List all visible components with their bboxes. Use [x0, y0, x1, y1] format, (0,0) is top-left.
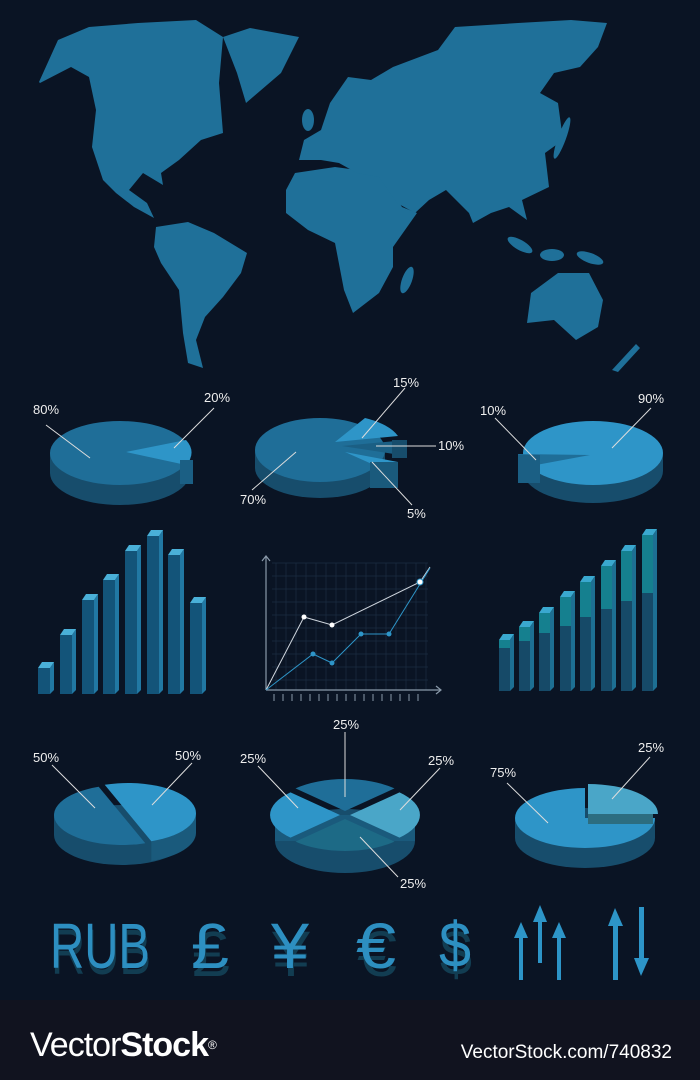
- pie chart 5: four quarters: [240, 717, 454, 891]
- pie chart 1: 80/20: 20%: [204, 390, 230, 405]
- footer logo: VectorStock®: [30, 1026, 217, 1064]
- pie chart 3: 90/10: 90%: [638, 391, 664, 406]
- currency symbols row: $: [439, 909, 471, 981]
- pie chart 2: 70/15/10/5: 10%: [438, 438, 464, 453]
- currency symbols row: [50, 909, 472, 990]
- footer url: VectorStock.com/740832: [461, 1042, 672, 1063]
- pie chart 1: 80/20: [33, 390, 230, 505]
- currency symbols row: €: [356, 910, 396, 982]
- pie chart 5: four quarters: 25%: [428, 753, 454, 768]
- stacked bar chart right: [499, 529, 657, 691]
- pie chart 2: 70/15/10/5: 15%: [393, 375, 419, 390]
- pie chart 5: four quarters: 25%: [240, 751, 266, 766]
- arrows icons: [514, 905, 649, 980]
- pie chart 5: four quarters: 25%: [333, 717, 359, 732]
- pie chart 4: 50/50: 50%: [33, 750, 59, 765]
- currency symbols row: ¥: [271, 918, 310, 990]
- pie chart 2: 70/15/10/5: 70%: [240, 492, 266, 507]
- line chart: [262, 556, 441, 701]
- pie chart 2: 70/15/10/5: 5%: [407, 506, 426, 521]
- pie chart 3: 90/10: 10%: [480, 403, 506, 418]
- pie chart 3: 90/10: [480, 391, 664, 503]
- currency symbols row: ¥: [270, 910, 309, 982]
- pie chart 4: 50/50: 50%: [175, 748, 201, 763]
- currency symbols row: €: [357, 918, 397, 990]
- pie chart 6: 75/25: [490, 740, 664, 868]
- currency symbols row: RUB: [51, 916, 151, 988]
- pie chart 2: 70/15/10/5: [240, 375, 464, 521]
- currency symbols row: £: [191, 910, 229, 982]
- world map: [39, 20, 640, 372]
- currency symbols row: RUB: [50, 910, 150, 982]
- pie chart 6: 75/25: 75%: [490, 765, 516, 780]
- pie chart 1: 80/20: 80%: [33, 402, 59, 417]
- bar chart left: [38, 530, 206, 694]
- pie chart 6: 75/25: 25%: [638, 740, 664, 755]
- currency symbols row: $: [440, 917, 472, 989]
- footer band: [0, 1000, 700, 1080]
- pie chart 4: 50/50: [33, 748, 201, 865]
- currency symbols row: £: [192, 918, 230, 990]
- pie chart 5: four quarters: 25%: [400, 876, 426, 891]
